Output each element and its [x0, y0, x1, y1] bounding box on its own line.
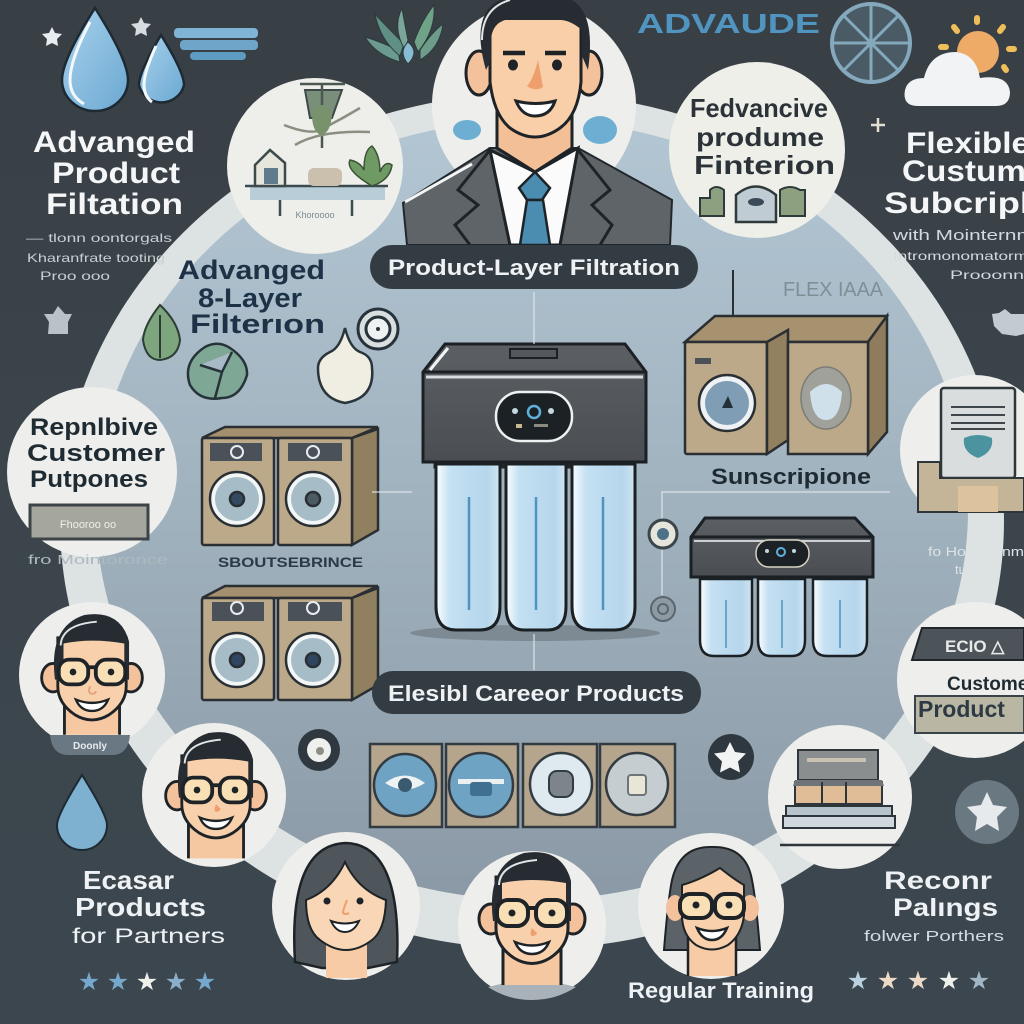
circle: responsive customer — [7, 387, 177, 557]
faint heading top right: ADVAUDE — [637, 8, 820, 39]
icon: star right — [992, 309, 1024, 336]
star rating left: ★ — [165, 968, 187, 996]
heading: regular pairings for partners: Reconr — [884, 867, 992, 895]
icon: star badge right — [955, 780, 1019, 844]
text block: right description — [892, 227, 1024, 282]
circle: scene illustration: Khoroooo — [295, 210, 335, 220]
icon: star sparkles — [42, 17, 151, 46]
person: presenter in suit — [403, 0, 672, 245]
row of four product tiles — [370, 744, 675, 827]
icon: wheel — [832, 2, 911, 84]
icon: white lotus — [318, 328, 372, 403]
star rating right: ★ — [847, 967, 869, 995]
star rating left: ★ — [136, 968, 158, 996]
star rating left — [78, 968, 216, 996]
icon: star badge — [708, 734, 754, 780]
text block: right description: with Mointernn — [892, 227, 1024, 244]
star rating left: ★ — [107, 968, 129, 996]
star rating right: ★ — [938, 967, 960, 995]
label pill: product-layer filtration — [370, 245, 698, 289]
person: glasses man bottom center — [458, 851, 606, 1000]
icon: rock leaf — [188, 344, 247, 399]
text block: left description: Proo ooo — [40, 269, 110, 283]
connector lines — [372, 292, 890, 670]
circle: customer product: ECIO △ — [945, 637, 1005, 656]
subscription box — [685, 270, 887, 454]
circle: customer product: Product — [918, 696, 1005, 722]
circle: responsive customer: Fhooroo oo — [60, 519, 116, 531]
circle: responsive customer: Putpones — [30, 466, 148, 493]
small water filter — [691, 518, 873, 656]
icon: small star left — [44, 306, 72, 334]
label pill: flexible career products — [372, 671, 701, 714]
person: woman with glasses — [638, 833, 784, 979]
faint text top right of disc: FLEX IAAA — [783, 279, 884, 301]
circle: customer product — [897, 602, 1024, 758]
star rating right: ★ — [968, 967, 990, 995]
text block: left description: Kharanfrate tooting — [27, 251, 165, 265]
heading: advanced 8-layer filtration: 8-Layer — [198, 283, 303, 313]
heading: advanced product filtration: Filtation — [46, 188, 183, 221]
heading: ecasar products for partners: for Partners — [72, 925, 225, 948]
icon: leaf — [143, 305, 180, 360]
icon: node rings — [649, 520, 677, 621]
icon: large water drops — [62, 8, 184, 111]
circle: responsive customer: Customer — [27, 440, 165, 467]
icon: plus — [871, 118, 885, 132]
circle: responsive customer: Repnlbive — [30, 414, 158, 441]
person: woman — [272, 832, 420, 980]
icon: small ring — [358, 309, 398, 349]
washer pair upper — [202, 427, 378, 545]
heading: advanced 8-layer filtration — [178, 255, 325, 339]
text block: right middle — [928, 544, 1024, 577]
person: glasses man left — [19, 602, 165, 755]
heading: advanced product filtration — [33, 126, 195, 221]
star rating right: ★ — [907, 967, 929, 995]
label pill: flexible career products: Elesibl Careeor Products — [388, 681, 684, 706]
heading: ecasar products for partners — [72, 865, 225, 948]
icon: ring node lower — [298, 729, 340, 771]
text block: right description: Prooonn — [950, 268, 1024, 282]
label: regular training: Regular Training — [628, 978, 814, 1003]
heading: advanced 8-layer filtration: Advanged — [178, 255, 325, 285]
heading: advanced 8-layer filtration: Filterıon — [190, 309, 325, 339]
person: glasses man lower left — [142, 723, 286, 867]
circle: scene illustration — [227, 78, 403, 254]
star rating left: ★ — [194, 968, 216, 996]
person: glasses man left: Doonly — [73, 741, 107, 752]
text block: right description: Intromonomatorm — [893, 249, 1024, 263]
star rating right — [847, 967, 990, 995]
heading: regular pairings for partners: Palıngs — [893, 894, 998, 922]
circle: right callout with text: produme — [696, 122, 824, 152]
label: subscription: Sunscripione — [711, 464, 871, 489]
heading: flexible custom subscription: Subcripl — [884, 187, 1024, 220]
heading: regular pairings for partners: folwer Porthers — [864, 928, 1004, 945]
icon: sun and cloud — [905, 18, 1014, 106]
heading: ecasar products for partners: Ecasar — [83, 865, 174, 895]
circle: right callout with text: Fedvancive — [690, 93, 828, 123]
label under upper washers: SBOUTSEBRINCE — [218, 554, 363, 570]
heading: advanced product filtration: Product — [52, 157, 180, 190]
icon: drop lower left — [57, 775, 107, 850]
circle: right callout with text: Finterion — [694, 150, 835, 180]
circle: stacked products — [768, 725, 912, 869]
heading: flexible custom subscription: Custum — [902, 155, 1024, 188]
text block: right middle: tuipo — [955, 562, 983, 577]
icon: stacked blue bars — [174, 28, 258, 60]
heading: ecasar products for partners: Products — [75, 892, 206, 922]
text block: left description: — tlonn oontorgals — [26, 231, 172, 245]
icon: leaves top — [365, 5, 443, 64]
circle: document scene — [900, 375, 1024, 525]
heading: flexible custom subscription — [884, 127, 1024, 220]
central disc with ring — [60, 93, 1004, 949]
text block: left description — [26, 231, 172, 283]
central water filter — [410, 344, 660, 641]
label pill: product-layer filtration: Product-Layer Filtration — [388, 255, 680, 280]
text block: right middle: fo Hotnoronm — [928, 544, 1024, 559]
star rating right: ★ — [877, 967, 899, 995]
washer pair lower — [202, 586, 378, 700]
heading: flexible custom subscription: Flexible — [906, 127, 1024, 160]
text block: under customer circle: fro Mointoronce — [28, 552, 168, 567]
circle: right callout with text — [669, 62, 845, 238]
star rating left: ★ — [78, 968, 100, 996]
heading: regular pairings for partners — [864, 867, 1004, 945]
heading: advanced product filtration: Advanged — [33, 126, 195, 159]
